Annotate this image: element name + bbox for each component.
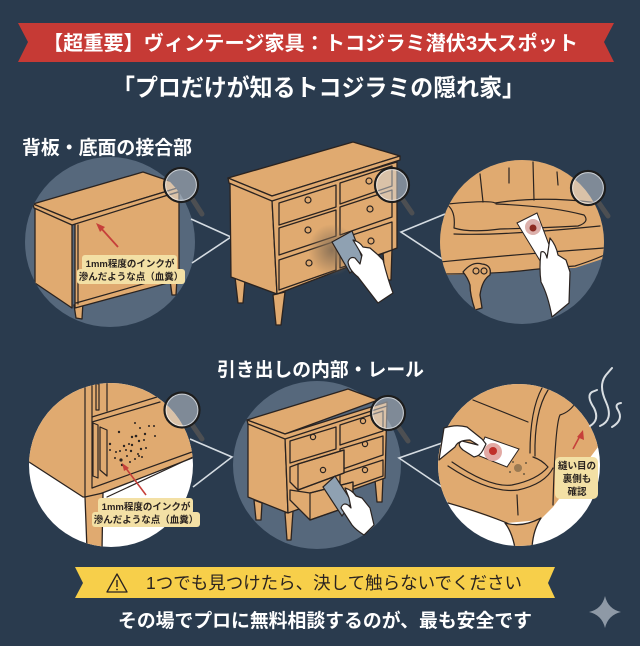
blood specks bbox=[109, 422, 156, 466]
heading: drawer interior and rails: 引き出しの内部・レール bbox=[217, 359, 424, 381]
panel: chest with open drawers bbox=[233, 381, 401, 549]
icon: smell waves bbox=[589, 368, 621, 427]
heading: back panel and base joints: 背板・底面の接合部 bbox=[22, 137, 192, 159]
gloved hand bbox=[439, 426, 486, 460]
warning ribbon bbox=[75, 567, 555, 598]
icon: magnifier centre bottom bbox=[371, 396, 408, 441]
open drawers bbox=[290, 450, 353, 520]
icon: magnifier top right bbox=[571, 171, 608, 216]
panel: sofa closeup bbox=[440, 160, 604, 324]
specks bbox=[509, 461, 527, 475]
knobs bbox=[305, 178, 374, 266]
test card with blood stain bbox=[517, 213, 554, 264]
title ribbon bbox=[18, 23, 614, 62]
phone bbox=[323, 476, 352, 516]
callout: 滲んだような点（血糞） bbox=[94, 514, 198, 526]
callout: 縫い目の bbox=[558, 460, 596, 472]
red arrow bbox=[122, 463, 146, 495]
drawers bbox=[279, 166, 392, 290]
hand bbox=[341, 488, 374, 535]
hand bbox=[540, 238, 570, 317]
connector lines left to chest bbox=[191, 219, 231, 263]
connector lines lower right bbox=[399, 443, 442, 487]
subtitle: 「プロだけが知るトコジラミの隠れ家」 bbox=[112, 74, 525, 102]
icon: sparkle bbox=[589, 596, 621, 628]
icon: warning triangle bbox=[107, 574, 127, 592]
warning ribbon: 1つでも見つけたら、決して触らないでください bbox=[146, 573, 522, 593]
icon: magnifier bottom left bbox=[164, 392, 202, 439]
panel: drawer interior closeup bbox=[29, 383, 200, 547]
connector lines lower left bbox=[190, 439, 232, 487]
title ribbon: 【超重要】ヴィンテージ家具：トコジラミ潜伏3大スポット bbox=[43, 31, 578, 55]
callout: 確認 bbox=[567, 486, 587, 498]
red arrow bbox=[573, 430, 584, 449]
callout: 1mm程度のインクが bbox=[102, 501, 191, 513]
callout: 滲んだような点（血糞） bbox=[79, 271, 183, 283]
phone bbox=[332, 231, 363, 273]
panel: back panel closeup bbox=[25, 157, 195, 327]
callout bbox=[77, 255, 185, 284]
closing message: その場でプロに無料相談するのが、最も安全です bbox=[118, 609, 532, 632]
hand bbox=[348, 240, 393, 303]
callout: 裏側も bbox=[563, 473, 591, 485]
icon: magnifier top left bbox=[164, 168, 202, 214]
panel: sofa arm closeup bbox=[438, 384, 600, 546]
red arrow bbox=[96, 223, 118, 247]
callout bbox=[92, 498, 200, 527]
callout bbox=[555, 457, 598, 499]
panel: central chest of drawers bbox=[228, 142, 400, 325]
icon: magnifier centre top bbox=[375, 168, 412, 213]
callout: 1mm程度のインクが bbox=[86, 258, 175, 270]
test card with blood stain bbox=[477, 437, 519, 467]
knobs bbox=[310, 418, 368, 473]
connector lines right bbox=[401, 214, 445, 259]
